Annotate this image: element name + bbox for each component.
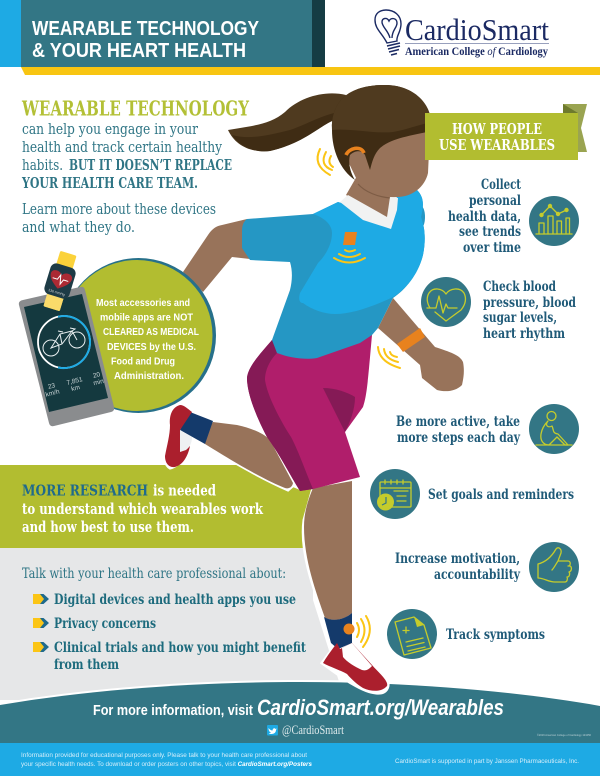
footer band: more information: @CardioSmart	[282, 723, 344, 737]
item: increase motivation: accountability	[434, 567, 521, 583]
phone stats: 23	[47, 382, 56, 391]
bicycle	[43, 328, 85, 356]
ribbon heading: how people use wearables	[425, 104, 587, 160]
device: chest sensor	[343, 232, 357, 245]
intro text block: YOUR HEALTH CARE TEAM.	[21, 175, 198, 192]
item: collect personal health data: health data,	[448, 209, 521, 225]
bullet list: Digital devices and health apps you use	[54, 592, 296, 608]
icon: stretching person	[529, 404, 579, 454]
phone stats: km/h	[45, 388, 61, 399]
item: collect personal health data: Collect	[481, 177, 522, 193]
ribbon heading: how people use wearables: HOW PEOPLE	[452, 121, 542, 138]
footer band: more information: For more information, visit	[93, 702, 253, 719]
title: WEARABLE TECHNOLOGY	[32, 18, 260, 40]
title	[32, 18, 260, 62]
footer: disclaimer band: Information provided for educational purposes only. Please talk to your health care professional about	[21, 752, 307, 759]
intro text block: BUT IT DOESN’T REPLACE	[69, 157, 232, 174]
panel: talk with your health care professional: Talk with your health care professional about:	[22, 566, 286, 582]
signal: ankle	[357, 616, 370, 647]
item: collect personal health data: personal	[469, 193, 521, 209]
shirt	[242, 190, 425, 359]
bullet list: Clinical trials and how you might benefit	[54, 640, 306, 656]
phone illustration	[19, 287, 114, 426]
intro text block: and what they do.	[22, 220, 135, 236]
smartwatch illustration	[39, 249, 81, 313]
ponytail	[228, 93, 346, 151]
bullet list: Privacy concerns	[54, 616, 156, 632]
device: ankle sensor	[344, 624, 354, 634]
back leg and shoe	[165, 404, 296, 490]
item: check blood pressure	[421, 277, 576, 342]
header banner	[0, 0, 600, 75]
footer: disclaimer band	[0, 743, 600, 776]
intro text block: can help you engage in your	[22, 122, 198, 138]
item: track symptoms: Track symptoms	[446, 627, 545, 643]
callout circle: not cleared as medical devices: mobile apps are NOT	[100, 312, 194, 324]
item: check blood pressure: Check blood	[483, 279, 556, 295]
right arm and hand	[378, 298, 464, 391]
intro text block: WEARABLE TECHNOLOGY	[21, 96, 249, 120]
signal: chest	[334, 250, 365, 262]
intro text block: habits.	[22, 158, 63, 174]
panel: more research: is needed	[153, 482, 216, 500]
item: be more active: Be more active, take	[396, 414, 520, 430]
item: track symptoms	[387, 609, 545, 659]
phone stats: km	[71, 384, 81, 393]
item: collect personal health data: over time	[463, 240, 521, 256]
callout circle: not cleared as medical devices: Administration.	[114, 370, 184, 382]
intro text block: health and track certain healthy	[22, 140, 223, 156]
icon: document	[387, 609, 437, 659]
panel: more research: MORE RESEARCH	[22, 482, 148, 500]
shorts	[247, 335, 372, 491]
icon: calendar and clock	[370, 469, 420, 519]
neck	[346, 176, 391, 219]
item: increase motivation	[395, 542, 579, 592]
ribbon heading: how people use wearables: USE WEARABLES	[439, 137, 555, 154]
footer: disclaimer band: your specific health needs. To download or order posters on other topics, visit CardioSmart.org/Posters	[21, 761, 312, 768]
intro text block: Learn more about these devices	[22, 202, 216, 218]
logo: CardioSmart	[375, 10, 549, 58]
head and face	[332, 85, 431, 197]
footer: disclaimer band: CardioSmart is supported in part by Janssen Pharmaceuticals, Inc.	[395, 758, 579, 765]
phone stats	[45, 371, 105, 399]
item: check blood pressure: sugar levels,	[483, 310, 557, 326]
phone stats: 7,851	[66, 376, 84, 387]
phone stats: 20	[92, 371, 101, 380]
footer band: more information: CardioSmart.org/Wearables	[257, 695, 504, 720]
item: check blood pressure: pressure, blood	[483, 295, 576, 311]
icon: twitter	[267, 725, 278, 736]
panel: more research	[0, 465, 313, 548]
bullet list: from them	[54, 657, 119, 673]
item: increase motivation: Increase motivation,	[395, 551, 520, 567]
phone stats: min	[93, 378, 105, 387]
footer band: more information	[0, 680, 600, 743]
item: check blood pressure: heart rhythm	[483, 326, 565, 342]
front leg, sock and shoe	[303, 481, 388, 693]
item: set goals and reminders	[370, 469, 574, 519]
icon: heart with pulse	[421, 277, 471, 327]
bullet list	[33, 592, 306, 673]
signal: wrist	[378, 347, 400, 368]
icon: thumbs up	[529, 542, 579, 592]
item: be more active: more steps each day	[397, 430, 521, 446]
collar	[340, 195, 398, 229]
footer band: more information: ©2016 American College of Cardiology 123456	[537, 733, 591, 737]
callout circle: not cleared as medical devices	[61, 258, 216, 413]
item: collect personal health data	[448, 177, 579, 256]
item: collect personal health data: see trends	[459, 224, 521, 240]
callout circle: not cleared as medical devices: Food and Drug	[111, 356, 175, 368]
smartwatch illustration: 136 mmHg	[48, 288, 65, 297]
callout circle: not cleared as medical devices: CLEARED AS MEDICAL	[103, 326, 199, 338]
logo: CardioSmart: American College of Cardiology	[405, 44, 548, 58]
panel: more research: and how best to use them.	[22, 519, 194, 536]
intro text block	[21, 96, 249, 236]
title: & YOUR HEART HEALTH	[32, 40, 246, 62]
orange wristband	[397, 328, 425, 352]
left arm	[183, 219, 250, 292]
panel: talk with your health care professional	[0, 548, 345, 700]
item: be more active	[396, 404, 579, 454]
icon: bar chart	[529, 196, 579, 246]
panel: more research: to understand which wearables work	[22, 501, 264, 518]
callout circle: not cleared as medical devices: Most accessories and	[96, 297, 190, 309]
signal: ear	[318, 149, 333, 175]
activity ring	[38, 316, 90, 368]
callout circle: not cleared as medical devices: DEVICES by the U.S.	[107, 341, 196, 353]
device: hearing aid	[346, 148, 364, 155]
logo: CardioSmart: CardioSmart	[405, 12, 549, 47]
runner figure	[165, 85, 464, 693]
